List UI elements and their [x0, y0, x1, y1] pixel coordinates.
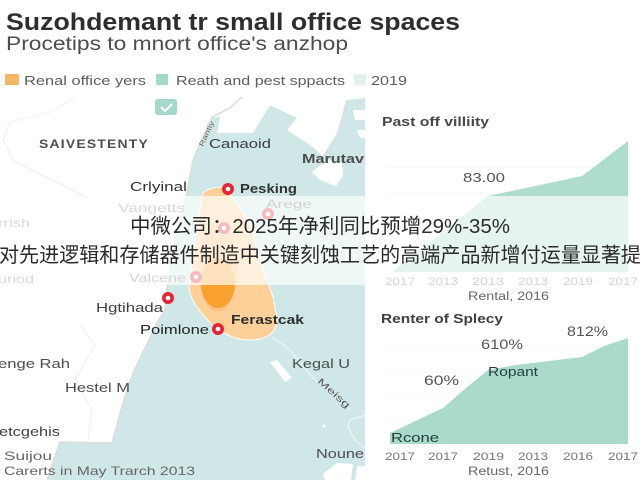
map labels: Marutav [302, 152, 364, 166]
x axis [385, 451, 638, 463]
panel: bottom right chart: Rcone [391, 431, 439, 445]
caption line 1: 中微公司：2025年净利同比预增29%-35% [130, 215, 510, 238]
x axis: 2017 [385, 276, 415, 288]
x axis: 2017 [608, 451, 638, 463]
map labels [0, 120, 364, 478]
panel: bottom right chart: 812% [567, 324, 608, 339]
orange hotspot middle [198, 224, 238, 312]
orange hotspot outer [189, 187, 277, 340]
x axis: 2013 [518, 451, 548, 463]
caption line 2: 对先进逻辑和存储器件制造中关键刻蚀工艺的高端产品新增付运量显著提 [0, 244, 640, 267]
x axis: 2017 [385, 451, 415, 463]
x axis: 2013 [518, 276, 548, 288]
subtitle: Procetips to mnort office's anzhop [6, 34, 348, 55]
map labels: Vangetts [118, 201, 185, 215]
map labels: Poimlone [140, 323, 209, 337]
legend: Reath and pest sppacts [176, 73, 346, 88]
chart heading: Renter of Splecy [381, 312, 503, 326]
area [390, 338, 628, 444]
caption overlay band [0, 196, 640, 285]
map labels: Crlyinal [130, 180, 187, 194]
map labels: Rantiy [198, 120, 217, 148]
map labels: Hgtihada [96, 301, 163, 315]
panel: map [0, 97, 365, 480]
icon: check badge [155, 99, 177, 115]
map labels: Arege [266, 197, 312, 211]
axis caption: Retust, 2016 [468, 466, 549, 478]
title: Suzohdemant tr small office spaces [6, 9, 460, 36]
map labels: Suijou [4, 451, 52, 463]
map labels: etcgehis [0, 425, 60, 439]
chart heading: Past off villiity [382, 115, 489, 129]
x axis: 2016 [563, 451, 593, 463]
x axis [385, 276, 638, 288]
orange hotspot core [201, 258, 235, 308]
value labels: 60% [424, 373, 459, 388]
map labels: Valcene [129, 271, 186, 285]
x axis: 2013 [428, 276, 458, 288]
map labels: Hestel M [65, 380, 130, 395]
legend: 2019 [371, 73, 407, 88]
map labels: Carerts in May Trarch 2013 [4, 464, 195, 478]
coast lines [47, 97, 347, 480]
map labels: SAIVESTENTY [39, 139, 149, 151]
road line [272, 337, 365, 448]
x axis: 2017 [428, 451, 458, 463]
axis caption: Rental, 2016 [468, 291, 549, 303]
value label: 83.00 [463, 170, 505, 185]
panel: bottom right chart: 610% [481, 337, 523, 352]
legend: Renal office yers [24, 73, 147, 88]
x axis: 2013 [472, 276, 504, 288]
map labels: Kegal U [292, 356, 350, 371]
panel: bottom right chart [381, 312, 638, 478]
faint boundaries on land [3, 98, 95, 440]
panel: bottom right chart: Ropant [488, 365, 539, 379]
legend [5, 73, 407, 88]
map labels: Meisg [316, 376, 352, 410]
panel: top right chart [382, 115, 638, 303]
map labels: Pesking [240, 182, 297, 196]
white blocks [270, 110, 365, 480]
area [392, 141, 628, 272]
map labels: Noune [316, 447, 364, 461]
map water/land area [47, 98, 365, 480]
x axis: 2017 [608, 276, 638, 288]
map labels: Canaoid [209, 137, 271, 151]
icon: red map pins [162, 183, 274, 335]
map labels: Ferastcak [231, 313, 304, 327]
x axis: 2019 [563, 276, 593, 288]
x axis: 2019 [473, 451, 504, 463]
